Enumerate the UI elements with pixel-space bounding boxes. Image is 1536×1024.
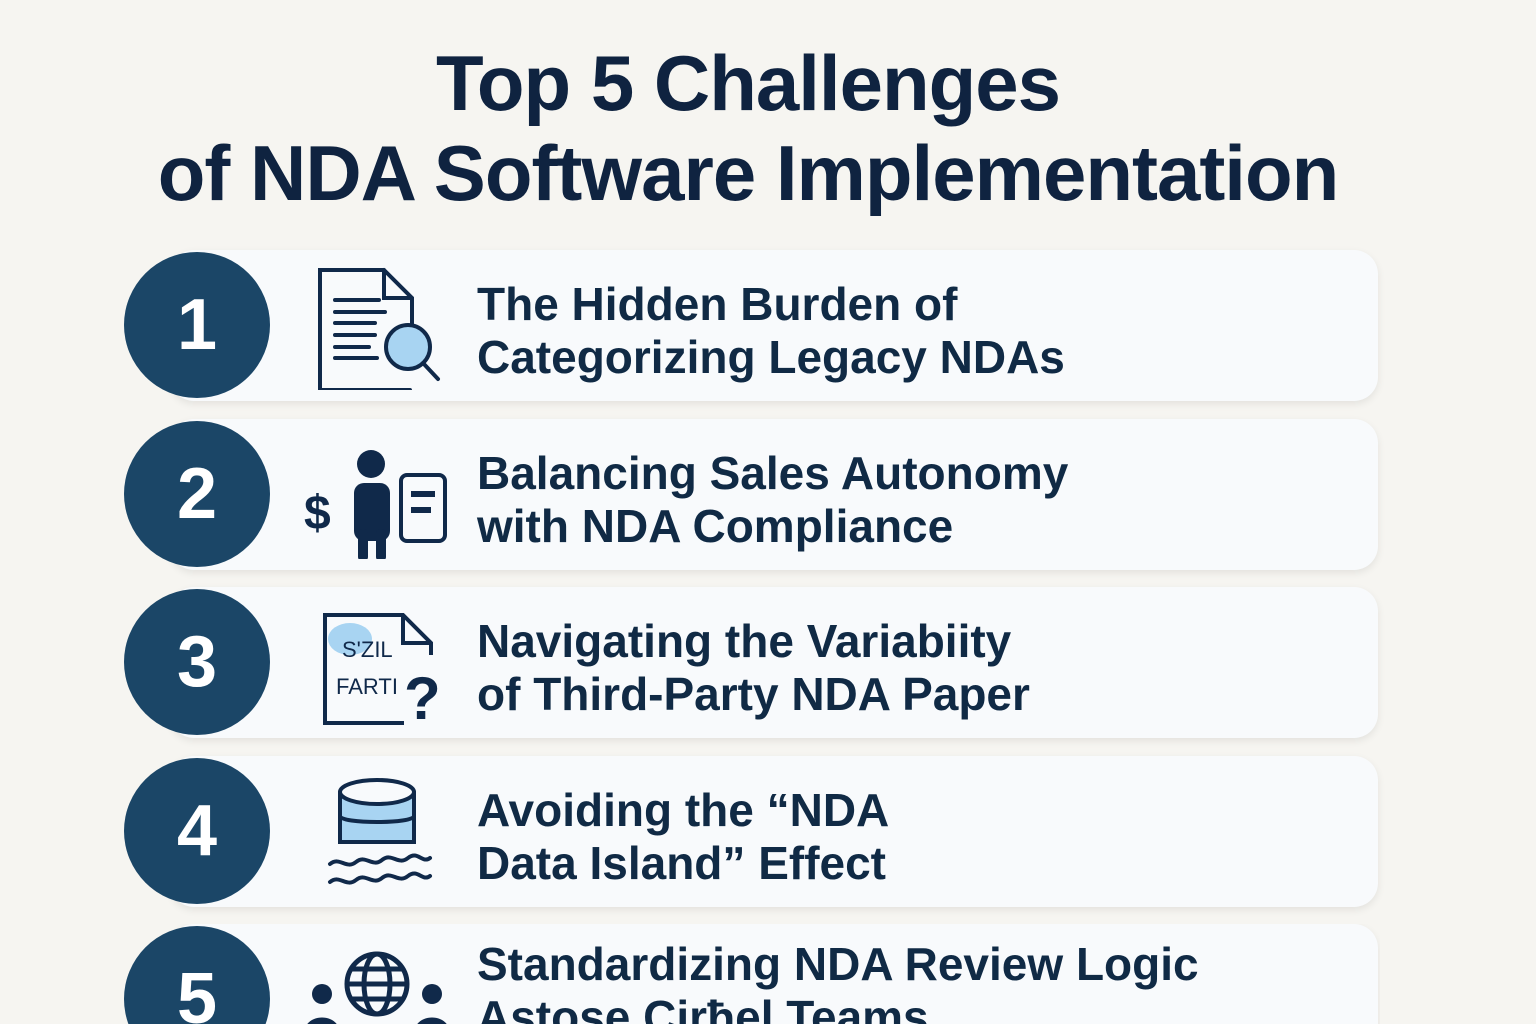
row 3 <box>124 587 1378 742</box>
row 2 <box>124 419 1378 574</box>
text 5 <box>477 938 1199 1024</box>
icon: database in water <box>328 778 432 885</box>
number 2 <box>124 421 270 567</box>
number 3 <box>124 589 270 735</box>
icon: person with dollar and form <box>304 450 447 559</box>
text 4: Avoiding the “NDA <box>477 784 889 836</box>
text 1 <box>477 278 1065 383</box>
row 1 <box>124 250 1378 404</box>
title <box>158 39 1338 217</box>
icon: document with question mark: FARTI <box>336 674 398 699</box>
text 5: Standardizing NDA Review Logic <box>477 938 1199 990</box>
text 2: with NDA Compliance <box>477 500 953 552</box>
icon: document with question mark: S'ZIL <box>342 637 393 662</box>
text 4 <box>477 784 889 889</box>
icon: person with dollar and form: $ <box>304 487 331 540</box>
number 3: 3 <box>177 622 217 702</box>
icon: globe with people <box>307 952 447 1024</box>
number 4 <box>124 758 270 904</box>
number 1 <box>124 252 270 398</box>
text 3: Navigating the Variabiity <box>477 615 1011 667</box>
title: Top 5 Challenges <box>436 39 1060 127</box>
row 5 <box>124 924 1378 1024</box>
number 5 <box>124 926 270 1024</box>
text 3: of Third-Party NDA Paper <box>477 668 1030 720</box>
title: of NDA Software Implementation <box>158 129 1338 217</box>
text 3 <box>477 615 1030 720</box>
text 4: Data Island” Effect <box>477 837 886 889</box>
number 1: 1 <box>177 285 217 365</box>
text 2 <box>476 447 1068 552</box>
text 1: The Hidden Burden of <box>477 278 957 330</box>
number 2: 2 <box>177 454 217 534</box>
icon: document with magnifier <box>318 268 440 390</box>
icon: document with question mark <box>323 613 441 727</box>
text 1: Categorizing Legacy NDAs <box>477 331 1065 383</box>
number 4: 4 <box>177 791 217 871</box>
text 2: Balancing Sales Autonomy <box>477 447 1068 499</box>
row 4 <box>124 756 1378 910</box>
